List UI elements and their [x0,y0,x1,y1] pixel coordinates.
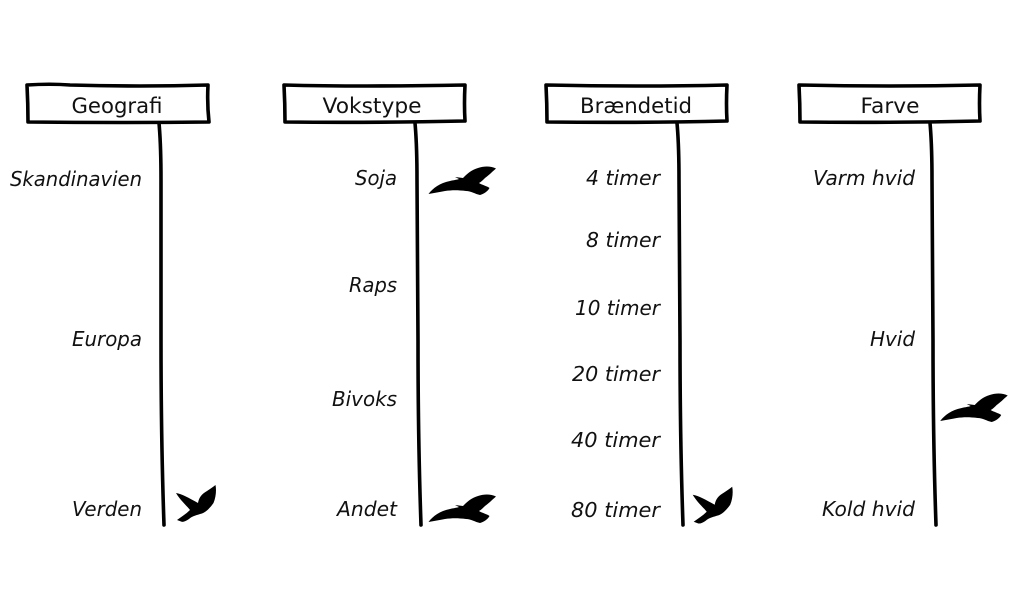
panel: Farve [799,85,1008,525]
label: Europa: Europa [72,327,142,351]
icon: bird marker Farve [940,394,1008,422]
axis line: Vokstype [415,123,421,525]
icon: bird marker Andet [428,495,496,523]
label: 10 timer: 10 timer [575,296,662,320]
heading box: Geografi [27,84,209,122]
label: Skandinavien: Skandinavien [10,167,142,191]
label: Soja: Soja [355,166,397,190]
panel: Geografi [10,84,216,525]
icon: bird marker Soja [428,167,496,195]
heading box: Farve: Farve [860,94,920,119]
label: Verden: Verden [72,497,142,521]
heading box: Farve [799,85,980,122]
label: Raps: Raps [349,273,397,297]
axis line: Farve [930,123,936,525]
label: Bivoks: Bivoks [332,387,397,411]
heading box: Brændetid [546,85,727,122]
label: 40 timer: 40 timer [571,428,662,452]
heading box: Geografi: Geografi [72,94,162,119]
heading box: Vokstype [284,85,465,122]
panel: Vokstype [284,85,496,525]
label: Hvid: Hvid [870,327,916,351]
label: 4 timer: 4 timer [586,166,662,190]
label: 20 timer: 20 timer [572,362,662,386]
icon: bird marker Geografi [176,485,216,522]
label: Andet: Andet [335,497,398,521]
label: 80 timer: 80 timer [571,498,662,522]
label: Varm hvid: Varm hvid [813,166,916,190]
axis line: Geografi [159,123,164,525]
heading box: Brændetid: Brændetid [580,94,692,119]
label: 8 timer: 8 timer [586,228,662,252]
axis line: Brændetid [677,123,683,525]
heading box: Vokstype: Vokstype [322,94,422,119]
label: Kold hvid: Kold hvid [822,497,916,521]
panel: Brændetid [546,85,733,525]
icon: bird marker 80 timer [693,487,733,524]
